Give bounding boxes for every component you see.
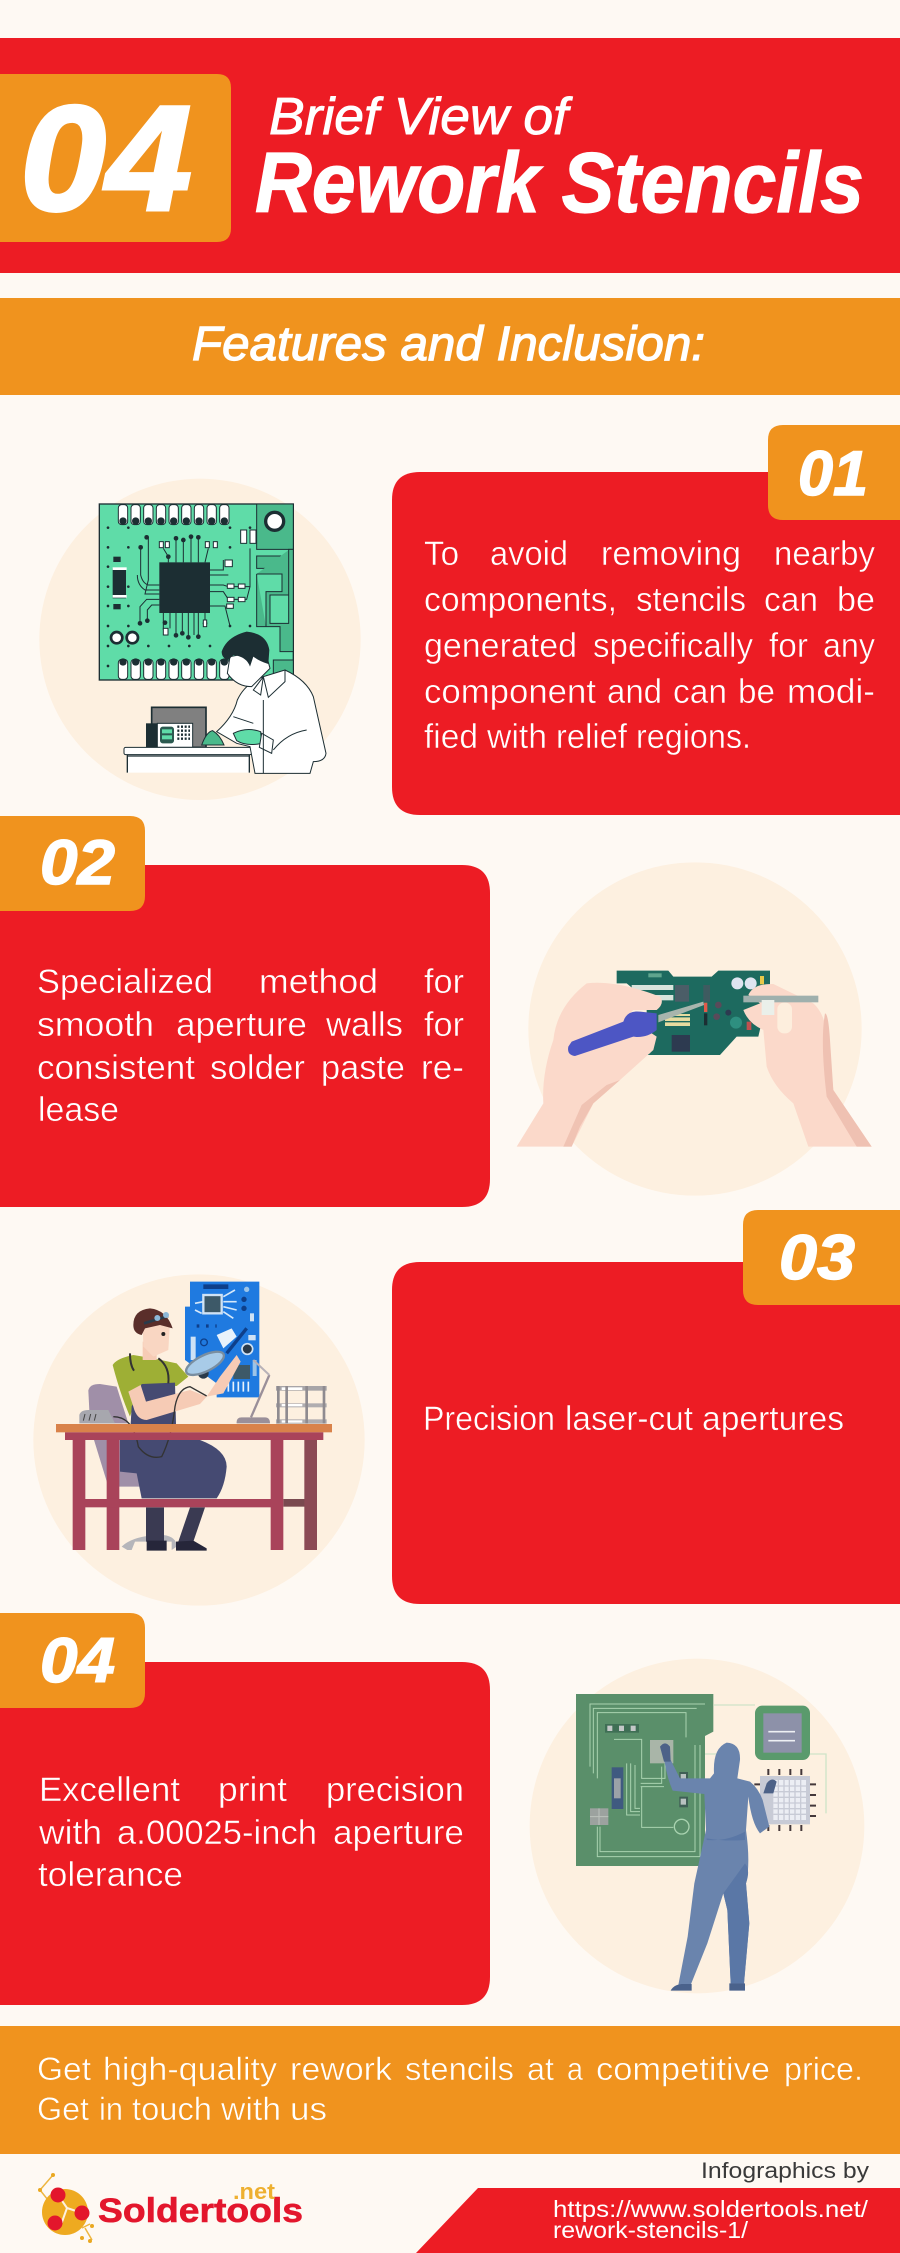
logo: Soldertools bbox=[38, 2173, 303, 2243]
chip: CPU bbox=[755, 1706, 810, 1760]
title bbox=[255, 88, 864, 231]
left hand with soldering iron bbox=[517, 983, 704, 1147]
feature 01 text: be bbox=[837, 581, 875, 619]
desk bbox=[56, 1424, 332, 1550]
call to action band: at bbox=[527, 2051, 554, 2087]
number box: 04 bbox=[20, 74, 192, 242]
badge 04 bbox=[0, 1613, 145, 1708]
call to action band: with bbox=[220, 2091, 281, 2127]
technician bbox=[217, 632, 326, 773]
feature 02 text: re- bbox=[421, 1049, 464, 1087]
feature 01 text: component bbox=[424, 673, 597, 711]
feature 04 text: Excellent bbox=[39, 1771, 181, 1809]
feature 01 text: generated bbox=[424, 627, 577, 665]
blue circuit board bbox=[185, 1282, 259, 1397]
logo: Soldertools: .net bbox=[233, 2179, 276, 2204]
feature 01 text: any bbox=[823, 627, 875, 665]
call to action band: competitive bbox=[596, 2051, 770, 2087]
header banner bbox=[0, 38, 900, 273]
feature 01 text: components, bbox=[424, 581, 617, 619]
call to action band: price. bbox=[784, 2051, 863, 2087]
feature 01 text: regions. bbox=[636, 718, 751, 756]
call to action band bbox=[0, 2026, 900, 2154]
call to action band: a bbox=[567, 2051, 583, 2087]
feature 01 text: modi- bbox=[787, 673, 875, 711]
feature 01 text: nearby bbox=[774, 535, 875, 573]
feature 02 text: smooth bbox=[37, 1006, 154, 1044]
feature 02 text: Specialized bbox=[37, 963, 213, 1001]
feature 02 text: for bbox=[424, 1006, 464, 1044]
feature 01 text bbox=[424, 535, 875, 756]
illustration 1: technician and green circuit board bbox=[39, 479, 361, 800]
feature 02 text: lease bbox=[38, 1091, 119, 1129]
badge 01 bbox=[768, 425, 900, 520]
desk bbox=[124, 747, 252, 773]
badge 03 bbox=[743, 1210, 900, 1305]
title: Rework Stencils bbox=[255, 136, 864, 231]
chip: grid bbox=[754, 1769, 816, 1831]
standing figure bbox=[660, 1743, 777, 1991]
machine on desk bbox=[146, 707, 224, 747]
feature 02 text: for bbox=[424, 963, 464, 1001]
feature 04 text: print bbox=[218, 1771, 288, 1809]
feature 01 text: relief bbox=[556, 718, 628, 756]
feature 03 text: apertures bbox=[702, 1400, 844, 1438]
badge 03: 03 bbox=[779, 1223, 855, 1293]
desk far side bbox=[283, 1499, 307, 1507]
panel: feature 02 bbox=[0, 816, 490, 1207]
feature 02 text: consistent bbox=[37, 1049, 196, 1087]
call to action band: Get bbox=[37, 2051, 91, 2087]
illustration 4: figure interacting with circuit board and chips bbox=[530, 1659, 864, 1993]
feature 02 text: method bbox=[259, 963, 378, 1001]
seated person bbox=[113, 1308, 241, 1551]
illustration 3: technician at a desk with blue board bbox=[33, 1274, 365, 1606]
feature 04 text bbox=[38, 1771, 464, 1894]
call to action band: high-quality bbox=[103, 2051, 277, 2087]
badge 02: 02 bbox=[40, 828, 115, 898]
feature 03 text bbox=[423, 1400, 844, 1438]
green circuit board bbox=[576, 1694, 713, 1866]
logo icon bbox=[38, 2173, 94, 2243]
feature 02 text: walls bbox=[325, 1006, 403, 1044]
feature 03 text: Precision bbox=[423, 1400, 555, 1438]
feature 01 text: fied bbox=[424, 718, 478, 756]
illustration 2: hands soldering a circuit board bbox=[517, 862, 872, 1196]
circuit board bbox=[617, 971, 770, 1055]
call to action band: us bbox=[290, 2091, 327, 2127]
section heading band: Features and Inclusion: bbox=[192, 318, 705, 371]
feature 01 text: with bbox=[486, 718, 547, 756]
badge 02 bbox=[0, 816, 145, 911]
panel: feature 03 bbox=[392, 1210, 900, 1604]
call to action band: rework bbox=[290, 2051, 393, 2087]
feature 01 text: can bbox=[764, 581, 818, 619]
feature 02 text: paste bbox=[321, 1049, 405, 1087]
feature 01 text: and bbox=[607, 673, 662, 711]
feature 01 text: stencils bbox=[636, 581, 746, 619]
lamp and rack bbox=[237, 1360, 327, 1424]
call to action band: touch bbox=[132, 2091, 212, 2127]
feature 01 text: be bbox=[738, 673, 775, 711]
feature 01 text: for bbox=[769, 627, 808, 665]
title: Brief View of bbox=[269, 88, 573, 146]
logo wordmark: Soldertools bbox=[98, 2192, 303, 2230]
feature 04 text: with bbox=[38, 1814, 102, 1852]
feature 01 text: specifically bbox=[593, 627, 753, 665]
footer link panel: rework-stencils-1/ bbox=[553, 2217, 749, 2243]
feature 02 text: solder bbox=[210, 1049, 305, 1087]
feature 01 text: can bbox=[673, 673, 727, 711]
feature 01 text: avoid bbox=[490, 535, 568, 573]
section heading band bbox=[0, 298, 900, 395]
panel: feature 04 bbox=[0, 1613, 490, 2005]
chair bbox=[79, 1384, 177, 1550]
call to action band: stencils bbox=[405, 2051, 514, 2087]
feature 01 text: To bbox=[424, 535, 459, 573]
call to action band: Get bbox=[37, 2091, 89, 2127]
panel: feature 01 bbox=[392, 425, 900, 815]
footer link panel bbox=[416, 2188, 900, 2253]
feature 01 text: removing bbox=[601, 535, 741, 573]
feature 04 text: aperture bbox=[333, 1814, 464, 1852]
feature 03 text: laser-cut bbox=[565, 1400, 694, 1438]
connector lines bbox=[705, 1705, 826, 1813]
badge 04: 04 bbox=[40, 1626, 115, 1696]
footer link panel: https://www.soldertools.net/ bbox=[553, 2196, 869, 2222]
call to action band: in bbox=[99, 2091, 123, 2127]
right hand with tweezers bbox=[743, 984, 872, 1147]
feature 02 text: aperture bbox=[176, 1006, 307, 1044]
feature 04 text: tolerance bbox=[38, 1856, 183, 1894]
feature 04 text: precision bbox=[326, 1771, 464, 1809]
credit label: Infographics by bbox=[701, 2158, 869, 2183]
feature 02 text bbox=[37, 963, 464, 1129]
feature 04 text: a.00025-inch bbox=[117, 1814, 317, 1852]
badge 01: 01 bbox=[798, 439, 868, 509]
